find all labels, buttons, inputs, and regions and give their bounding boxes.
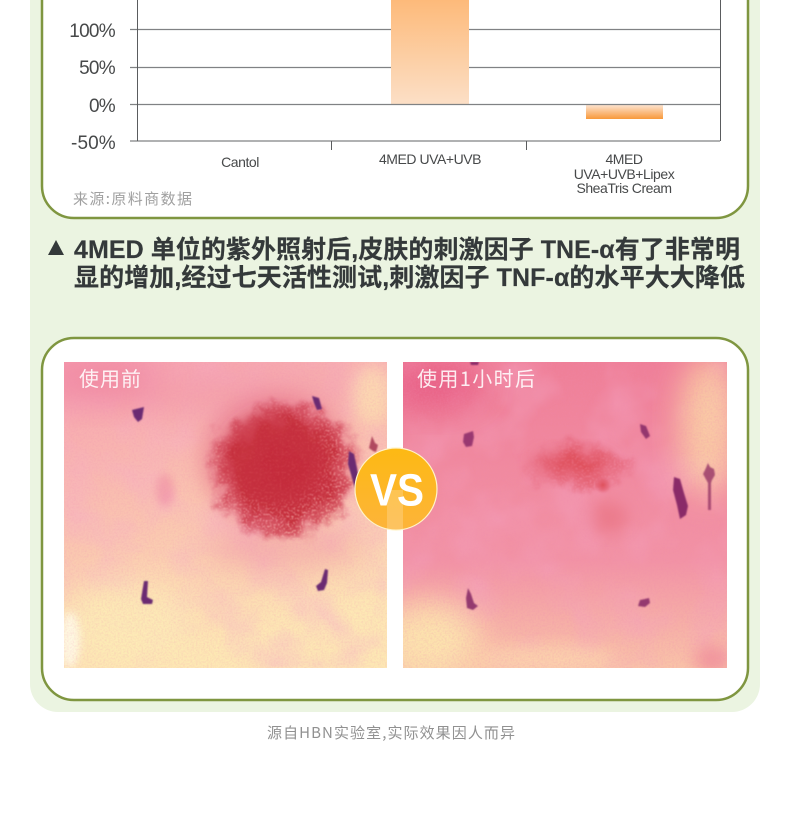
bar: 4MED UVA+UVB+Lipex [586, 105, 663, 119]
bar: 4MED UVA+UVB [391, 0, 469, 104]
y-axis labels: 100% [69, 21, 116, 42]
label: before use: 使用前 [79, 363, 141, 392]
y-axis labels: 50% [79, 58, 116, 79]
x-axis labels: SheaTris Cream [576, 180, 672, 196]
x-axis labels [221, 151, 675, 196]
image: after 1 hour [403, 362, 727, 668]
image: before use [64, 362, 387, 668]
panel: comparison card [40, 338, 748, 700]
description line 1: 4MED 单位的紫外照射后,皮肤的刺激因子 TNE-α有了非常明 [74, 235, 740, 264]
footer disclaimer: 源自HBN实验室,实际效果因人而异 [267, 722, 515, 743]
x-axis labels: 4MED UVA+UVB [379, 151, 481, 167]
x-axis labels: 4MED [605, 151, 643, 167]
green background panel [30, 0, 760, 712]
y-axis labels: -50% [71, 133, 116, 154]
panel: chart card [42, 0, 748, 218]
bar chart [69, 0, 720, 196]
y-axis labels [69, 21, 116, 154]
x-axis labels: Cantol [221, 154, 259, 170]
y-axis labels: 0% [89, 96, 116, 117]
VS badge: VS [370, 464, 424, 516]
x-axis labels: UVA+UVB+Lipex [574, 166, 675, 182]
chart grid lines and axes [130, 0, 720, 150]
description line 2: 显的增加,经过七天活性测试,刺激因子 TNF-α的水平大大降低 [74, 264, 745, 292]
triangle bullet [48, 240, 64, 255]
VS badge [355, 448, 437, 530]
source note: 来源:原料商数据 [73, 188, 192, 209]
description text [48, 235, 745, 292]
label: after 1 hour: 使用1小时后 [417, 363, 535, 392]
